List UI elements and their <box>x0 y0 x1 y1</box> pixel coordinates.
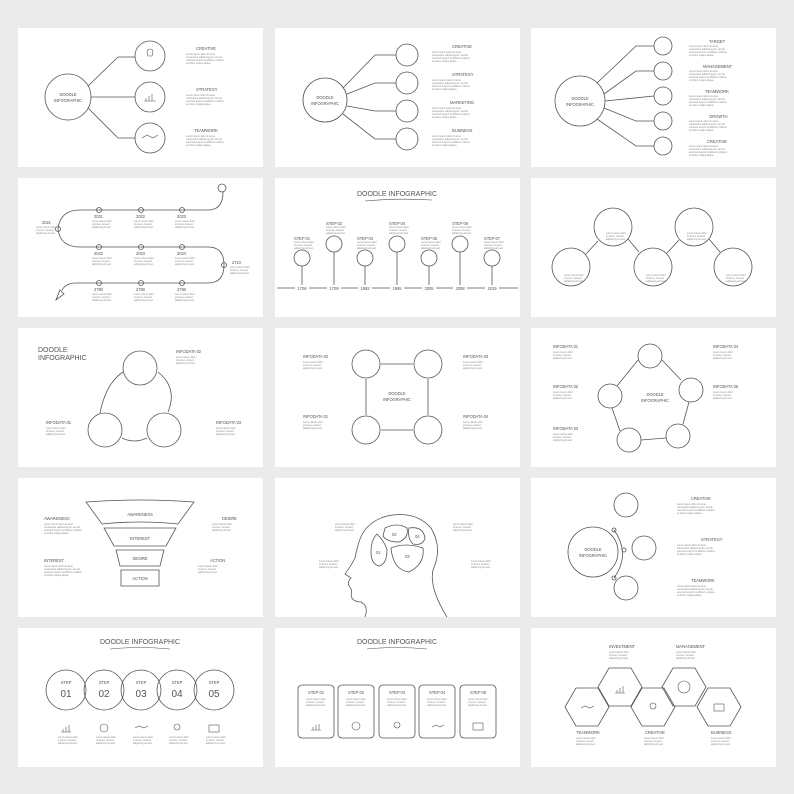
slide 3: mind map 5 branches: INFOGRAPHIC <box>566 102 594 107</box>
slide 4: snake timeline: 2710 <box>232 260 242 265</box>
slide 3: mind map 5 branches <box>531 28 776 167</box>
slide 8: 4-cycle: DOODLE <box>388 391 406 396</box>
slide 9: 5-cycle: INFODATA 02 <box>553 384 579 389</box>
slide 7: 3-cycle: INFODATA 02 <box>176 349 202 354</box>
slide 13: step circles: DOODLE INFOGRAPHIC <box>100 639 180 646</box>
slide 3: mind map 5 branches: DOODLE <box>571 96 589 101</box>
slide 8: 4-cycle: INFODATA 03 <box>463 354 489 359</box>
slide 13: step circles: 02 <box>98 689 110 700</box>
slide 10: funnel: ACTION <box>210 558 225 563</box>
slide 4: snake timeline: 2790 <box>94 287 104 292</box>
slide 5: step timeline: STEP 03 <box>357 236 374 241</box>
slide 5: step timeline: 2005 <box>425 286 434 291</box>
slide 15: hexagons: INVESTMENT <box>609 644 636 649</box>
slide 5: step timeline: STEP 02 <box>326 221 343 226</box>
slide 2: mind map 4 branches: BUSINESS <box>452 128 473 133</box>
slide 4: snake timeline: 2023 <box>136 251 146 256</box>
slide 8: 4-cycle <box>275 328 520 467</box>
slide 3: mind map 5 branches: TARGET <box>709 39 726 44</box>
slide 15: hexagons: TEAMWORK <box>576 730 600 735</box>
slide 1: mind map 3 branches: DOODLE <box>59 92 77 97</box>
slide 2: mind map 4 branches: DOODLE <box>316 95 334 100</box>
slide 14: step boxes: DOODLE INFOGRAPHIC <box>357 639 437 646</box>
slide 5: step timeline: STEP 01 <box>294 236 311 241</box>
slide 9: 5-cycle <box>531 328 776 467</box>
slide 13: step circles: STEP <box>61 680 72 685</box>
slide 8: 4-cycle: INFODATA 04 <box>463 414 489 419</box>
slide 14: step boxes: STEP 04 <box>429 690 446 695</box>
slide 3: mind map 5 branches: MANAGEMENT <box>703 64 733 69</box>
slide 5: step timeline: 1706 <box>298 286 307 291</box>
slide 9: 5-cycle: INFODATA 04 <box>713 344 739 349</box>
slide 1: mind map 3 branches: TEAMWORK <box>194 128 218 133</box>
slide 14: step boxes: STEP 03 <box>389 690 406 695</box>
slide 2: mind map 4 branches: MARKETING <box>450 100 474 105</box>
slide 7: 3-cycle: INFODATA 03 <box>216 420 242 425</box>
slide 5: step timeline: 2008 <box>456 286 465 291</box>
slide 3: mind map 5 branches: CREATIVE <box>707 139 727 144</box>
slide 2: mind map 4 branches: INFOGRAPHIC <box>311 101 339 106</box>
slide 13: step circles: 03 <box>135 689 147 700</box>
slide 12: circle with arc: TEAMWORK <box>691 578 715 583</box>
slide 2: mind map 4 branches <box>275 28 520 167</box>
slide 5: step timeline: 1992 <box>361 286 370 291</box>
slide 2: mind map 4 branches: STRATEGY <box>452 72 474 77</box>
slide 13: step circles: 05 <box>208 689 220 700</box>
slide 4: snake timeline <box>18 178 263 317</box>
slide 9: 5-cycle: INFODATA 03 <box>553 426 579 431</box>
slide 4: snake timeline: 2022 <box>136 214 146 219</box>
slide 5: step timeline: DOODLE INFOGRAPHIC <box>357 191 437 198</box>
slide 3: mind map 5 branches: GROWTH <box>709 114 728 119</box>
slide 11: head brain: 02 <box>392 532 397 537</box>
slide 4: snake timeline: 2790 <box>136 287 146 292</box>
slide 10: funnel: DESIRE <box>222 516 237 521</box>
slide 12: circle with arc: CREATIVE <box>691 496 711 501</box>
slide 4: snake timeline: 2790 <box>177 287 187 292</box>
slide 8: 4-cycle: INFOGRAPHIC <box>383 397 411 402</box>
slide 9: 5-cycle: INFODATA 01 <box>553 344 579 349</box>
slide 2: mind map 4 branches: CREATIVE <box>452 44 472 49</box>
slide 11: head brain <box>275 478 520 617</box>
slide 15: hexagons: BUSINESS <box>711 730 732 735</box>
slide 15: hexagons: CREATIVE <box>645 730 665 735</box>
slide 13: step circles: 01 <box>60 689 72 700</box>
slide 12: circle with arc <box>531 478 776 617</box>
slide 5: step timeline: STEP 06 <box>452 221 469 226</box>
slide 7: 3-cycle: DOODLE <box>38 347 68 354</box>
slide 10: funnel: AWARENESS <box>127 512 153 517</box>
slide 11: head brain: 01 <box>376 550 381 555</box>
slide 10: funnel: INTEREST <box>130 536 150 541</box>
slide 1: mind map 3 branches: CREATIVE <box>196 46 216 51</box>
slide 10: funnel: ACTION <box>132 576 148 581</box>
slide 4: snake timeline: 2022 <box>94 251 104 256</box>
slide 13: step circles <box>18 628 263 767</box>
slide 4: snake timeline: 2021 <box>42 220 52 225</box>
slide 1: mind map 3 branches: INFOGRAPHIC <box>54 98 82 103</box>
slide 1: mind map 3 branches <box>18 28 263 167</box>
slide 10: funnel <box>18 478 263 617</box>
slide 12: circle with arc: DOODLE <box>584 547 602 552</box>
slide 5: step timeline: STEP 04 <box>389 221 406 226</box>
slide 14: step boxes: STEP 05 <box>470 690 487 695</box>
slide 15: hexagons <box>531 628 776 767</box>
slide 5: step timeline <box>275 178 520 317</box>
slide 6: zigzag circles <box>531 178 776 317</box>
slide 5: step timeline: 1995 <box>393 286 402 291</box>
slide 4: snake timeline: 2021 <box>94 214 104 219</box>
slide 4: snake timeline: 2023 <box>177 214 187 219</box>
slide 8: 4-cycle: INFODATA 02 <box>303 354 329 359</box>
slide 7: 3-cycle: INFOGRAPHIC <box>38 355 87 362</box>
slide 14: step boxes: STEP 02 <box>348 690 365 695</box>
slide 7: 3-cycle <box>18 328 263 467</box>
slide 15: hexagons: MANAGEMENT <box>676 644 706 649</box>
slide 7: 3-cycle: INFODATA 01 <box>46 420 72 425</box>
slide 5: step timeline: STEP 07 <box>484 236 501 241</box>
slide 10: funnel: AWARENESS <box>44 516 70 521</box>
slide 13: step circles: STEP <box>99 680 110 685</box>
slide 5: step timeline: STEP 05 <box>421 236 438 241</box>
slide 9: 5-cycle: INFODATA 05 <box>713 384 739 389</box>
slide 3: mind map 5 branches: TEAMWORK <box>705 89 729 94</box>
slide 13: step circles: STEP <box>136 680 147 685</box>
slide 10: funnel: INTEREST <box>44 558 64 563</box>
slide 5: step timeline: 2019 <box>488 286 497 291</box>
slide 13: step circles: STEP <box>209 680 220 685</box>
slide 12: circle with arc: STRATEGY <box>701 537 723 542</box>
slide 13: step circles: STEP <box>172 680 183 685</box>
slide 10: funnel: DESIRE <box>132 556 148 561</box>
slide 9: 5-cycle: DOODLE <box>646 392 664 397</box>
slide 14: step boxes <box>275 628 520 767</box>
slide 14: step boxes: STEP 01 <box>308 690 325 695</box>
slide 9: 5-cycle: INFOGRAPHIC <box>641 398 669 403</box>
slide 5: step timeline: 1709 <box>330 286 339 291</box>
slide 13: step circles: 04 <box>171 689 183 700</box>
slide 4: snake timeline: 2024 <box>177 251 187 256</box>
slide 11: head brain: 03 <box>405 554 410 559</box>
slide 1: mind map 3 branches: STRATEGY <box>196 87 218 92</box>
slide 12: circle with arc: INFOGRAPHIC <box>579 553 607 558</box>
slide 11: head brain: 04 <box>415 534 420 539</box>
slide 8: 4-cycle: INFODATA 01 <box>303 414 329 419</box>
